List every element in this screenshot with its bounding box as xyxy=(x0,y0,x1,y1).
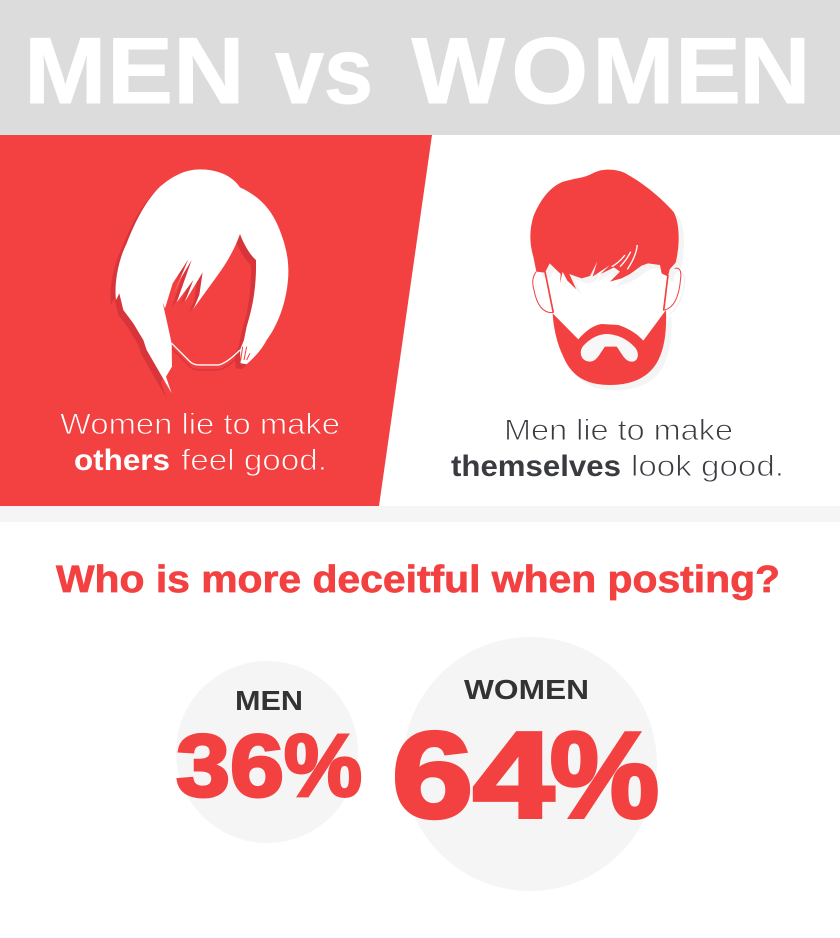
women statement text: feel good. xyxy=(181,444,327,477)
panel: men xyxy=(451,170,784,483)
title banner xyxy=(0,0,840,135)
panel: women xyxy=(0,135,432,506)
men statement text xyxy=(451,414,784,483)
stat: women 64%: % xyxy=(550,707,659,843)
stat: women 64%: 64 xyxy=(392,707,554,843)
men statement text: Men lie to make xyxy=(504,414,733,447)
stat: women 64%: WOMEN xyxy=(464,674,589,705)
women statement text: others xyxy=(74,444,170,477)
men statement text: look good. xyxy=(631,450,784,483)
stat: men 36%: 36 xyxy=(176,716,284,815)
women statement text xyxy=(60,408,340,477)
title: MEN vs WOMEN xyxy=(24,18,810,123)
heading: deceit question: Who is more deceitful when posting? xyxy=(56,559,780,601)
icon: man head with red hair and beard xyxy=(530,170,685,390)
stat: men 36% xyxy=(176,661,362,843)
title: MEN vs WOMEN: WOMEN xyxy=(412,19,810,123)
stat: men 36%: MEN xyxy=(235,685,303,716)
stat: women 64% xyxy=(392,637,659,891)
title: MEN vs WOMEN: MEN xyxy=(24,19,245,123)
title: MEN vs WOMEN: vs xyxy=(275,18,373,123)
divider band xyxy=(0,506,840,522)
women statement text: Women lie to make xyxy=(60,408,340,441)
stat: men 36%: % xyxy=(284,716,362,815)
men statement text: themselves xyxy=(451,450,621,483)
icon: woman head with white hair xyxy=(111,169,288,398)
